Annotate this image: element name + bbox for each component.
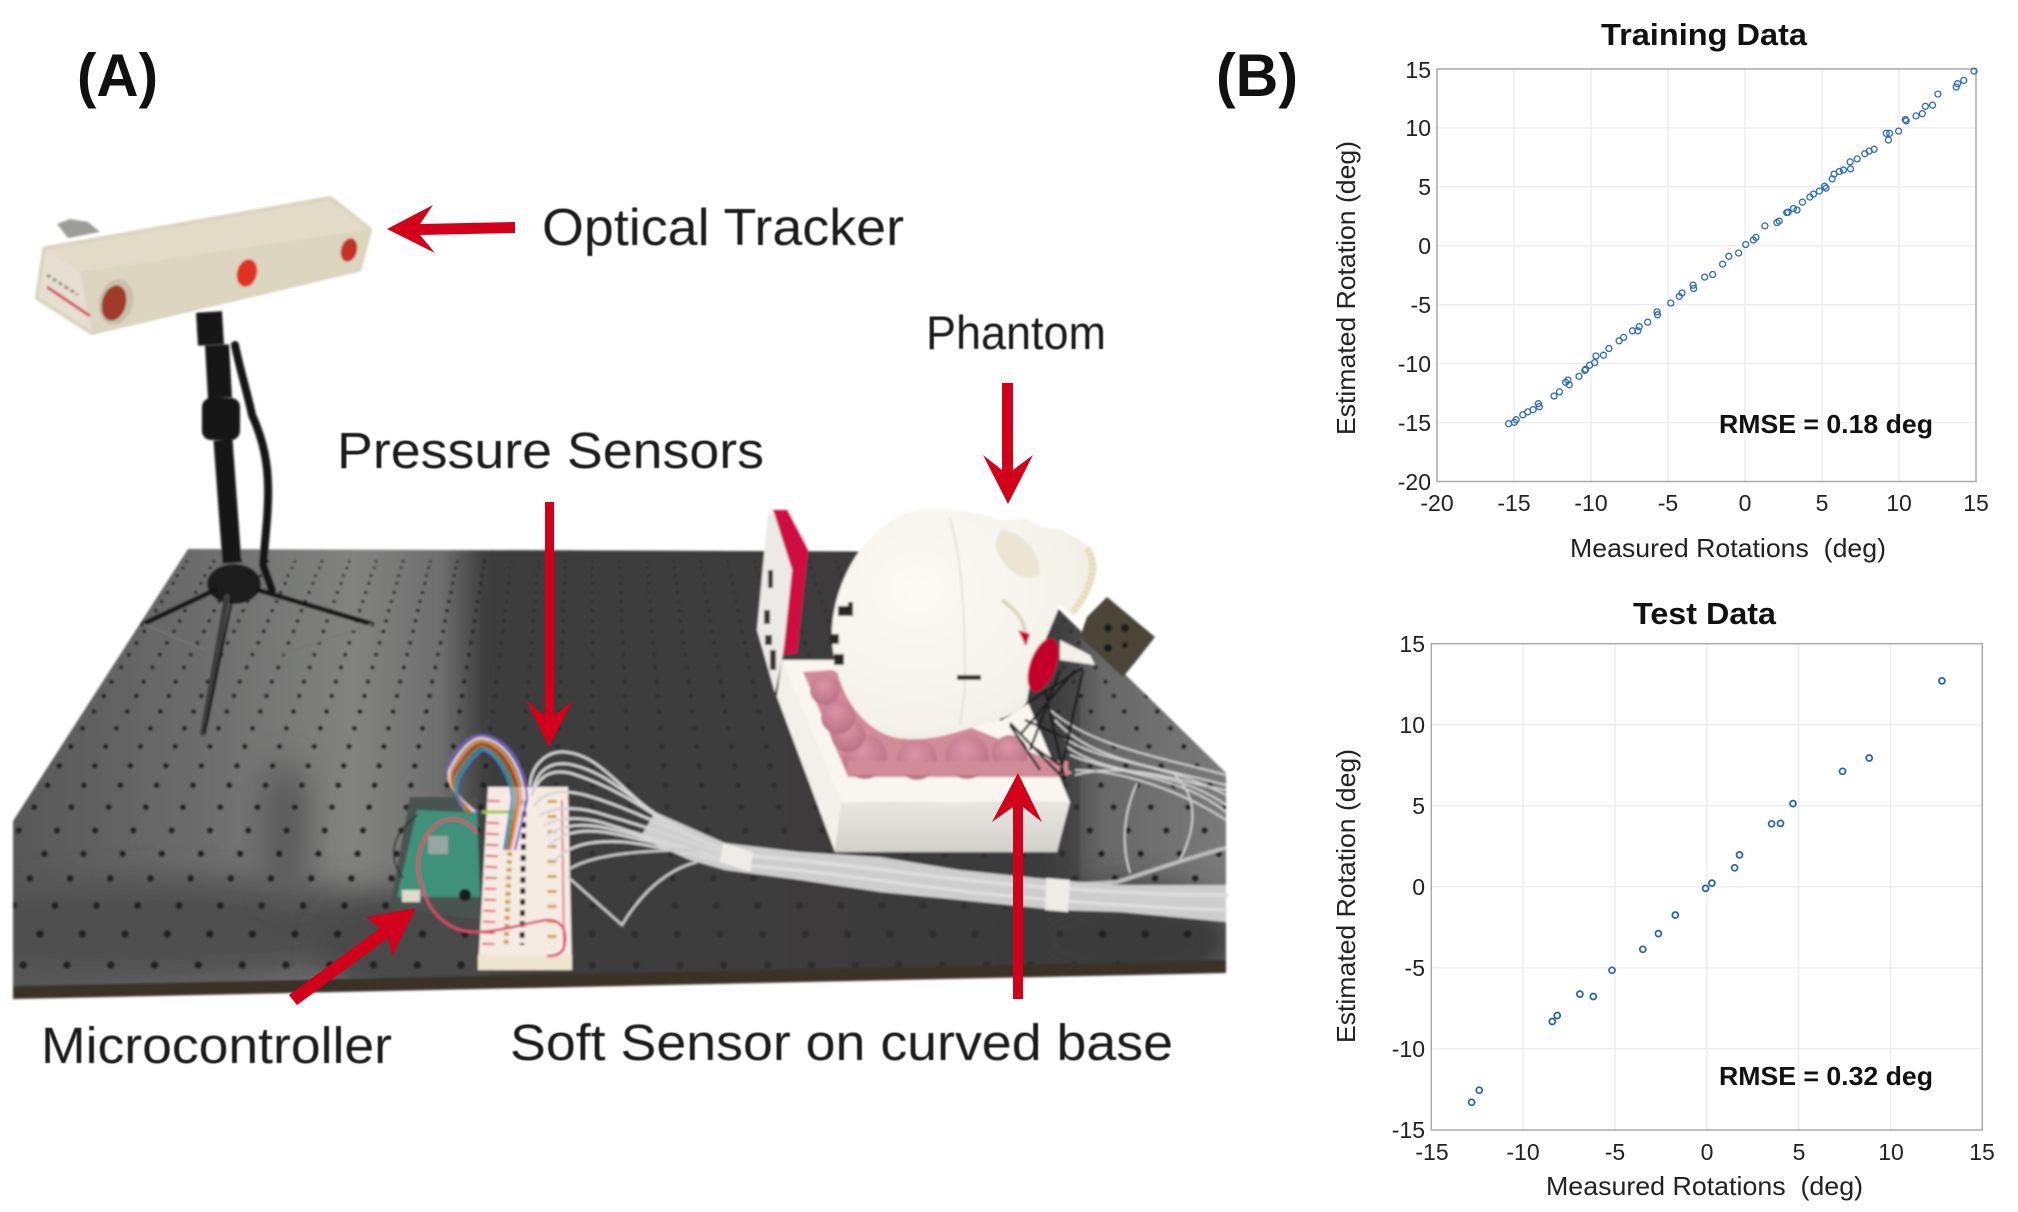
x axis ticks: test: -15 [1415, 1139, 1449, 1165]
photo labels [41, 199, 1173, 1074]
phantom fixture: red and white plate [757, 510, 808, 693]
x axis ticks: training: 10 [1886, 490, 1912, 516]
y axis label: training: Estimated Rotation (deg) [1331, 141, 1361, 435]
x axis label: test: Measured Rotations (deg) [1546, 1171, 1863, 1201]
label: optical tracker: Optical Tracker [542, 199, 904, 257]
y axis ticks: test: 0 [1412, 874, 1425, 900]
rmse: training: RMSE = 0.18 deg [1719, 409, 1933, 439]
x axis ticks: training: -5 [1658, 490, 1678, 516]
label: pressure sensors: Pressure Sensors [337, 422, 764, 479]
arrow: optical tracker [387, 205, 515, 253]
rainbow ribbon cable [448, 735, 527, 850]
red jumper wire [418, 819, 565, 956]
arrow: soft sensor [992, 773, 1042, 999]
label: microcontroller: Microcontroller [41, 1017, 392, 1074]
y axis ticks: training [1398, 57, 1431, 495]
scatter points: training [1506, 68, 1977, 427]
breadboard [478, 787, 572, 970]
x axis ticks: training [1420, 490, 1989, 516]
panel B bottom: test data scatter plot [1331, 596, 1995, 1201]
panel B top: training data scatter plot [1331, 17, 1989, 563]
arrow: phantom [983, 383, 1033, 504]
skull phantom [830, 509, 1097, 739]
x axis ticks: test: 15 [1969, 1139, 1995, 1165]
y axis ticks: training: 15 [1405, 57, 1431, 83]
soft sensor base [777, 660, 1073, 852]
black lattice support [1000, 668, 1083, 780]
panel label: B: (B) [1216, 42, 1298, 109]
x axis ticks: training: 5 [1816, 490, 1828, 516]
y axis label: test: Estimated Rotation (deg) [1331, 749, 1361, 1043]
arrow: microcontroller [289, 908, 416, 1005]
microcontroller board [390, 797, 480, 920]
label: phantom: Phantom [926, 306, 1106, 359]
x axis ticks: training: 0 [1739, 490, 1751, 516]
right side sensor wires [1040, 710, 1226, 887]
y axis ticks: training: 5 [1418, 174, 1431, 200]
white sensor tubing bundle [530, 752, 1226, 925]
x axis ticks: training: 15 [1963, 490, 1989, 516]
y axis ticks: training: -5 [1411, 292, 1431, 318]
optical tracker device [39, 200, 368, 331]
x axis label: training: Measured Rotations (deg) [1570, 533, 1886, 563]
tripod stand [143, 312, 372, 733]
rmse: test: RMSE = 0.32 deg [1719, 1061, 1933, 1091]
chart title: training: Training Data [1601, 17, 1808, 52]
chart title: test: Test Data [1633, 596, 1777, 631]
y axis ticks: training: -10 [1398, 351, 1431, 377]
x axis ticks: training: -15 [1497, 490, 1531, 516]
y axis ticks: test [1392, 631, 1425, 1143]
label: soft sensor: Soft Sensor on curved base [510, 1014, 1173, 1071]
soft sensor foam bumps [810, 675, 1068, 780]
y axis ticks: test: -15 [1392, 1117, 1425, 1143]
y axis ticks: test: 5 [1412, 793, 1425, 819]
x axis ticks: training: -10 [1574, 490, 1608, 516]
scatter points: test [1469, 678, 1945, 1105]
x axis ticks: test [1415, 1139, 1995, 1165]
panel label: A: (A) [77, 42, 158, 109]
y axis ticks: test: -10 [1392, 1036, 1425, 1062]
y axis ticks: training: 0 [1418, 233, 1431, 259]
x axis ticks: test: 10 [1878, 1139, 1904, 1165]
x axis ticks: test: -10 [1506, 1139, 1540, 1165]
optical marker [1080, 597, 1155, 677]
tubing tape bands [720, 843, 1070, 912]
y axis ticks: training: 10 [1405, 115, 1431, 141]
panel A: experimental setup photo [11, 195, 1228, 1005]
y axis ticks: training: -20 [1398, 469, 1431, 495]
y axis ticks: training: -15 [1398, 410, 1431, 436]
y axis ticks: test: 15 [1399, 631, 1425, 657]
optical table [0, 540, 1468, 1010]
y axis ticks: test: -5 [1405, 955, 1425, 981]
arrow: pressure sensors [526, 502, 573, 747]
x axis ticks: test: 5 [1793, 1139, 1805, 1165]
x axis ticks: test: 0 [1701, 1139, 1713, 1165]
x axis ticks: test: -5 [1605, 1139, 1625, 1165]
y axis ticks: test: 10 [1399, 712, 1425, 738]
x axis ticks: training: -20 [1420, 490, 1454, 516]
